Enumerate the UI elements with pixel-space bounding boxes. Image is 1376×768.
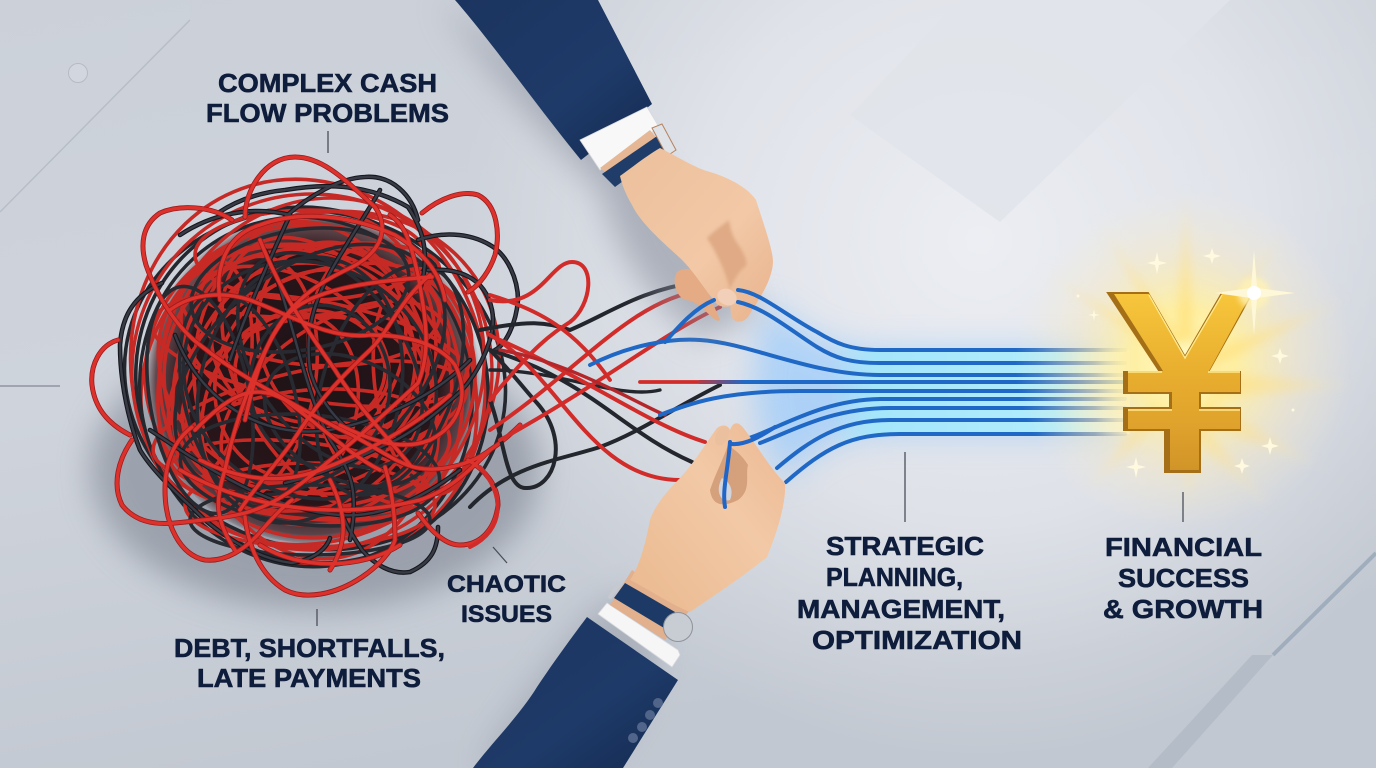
lower hand shadow (480, 590, 659, 768)
hand shadow (440, 0, 760, 340)
label: strategic planning, management, optimization: STRATEGIC (826, 531, 984, 561)
back fingers (675, 269, 720, 321)
lower arm and hand (473, 423, 785, 768)
upper arm and hand (440, 0, 773, 340)
label: complex cash flow problems (206, 68, 449, 153)
blue loop in lower hand (724, 427, 775, 507)
finger creases (707, 220, 747, 290)
label: strategic planning, management, optimization: OPTIMIZATION (812, 625, 1022, 655)
label: strategic planning, management, optimization: PLANNING, (826, 562, 963, 592)
black outer wires (120, 177, 518, 573)
label: debt, shortfalls, late payments: DEBT, SHORTFALLS, (174, 633, 445, 663)
dark inner wires (127, 194, 493, 555)
light rays (1035, 185, 1365, 540)
glow (1015, 190, 1355, 530)
large sparkle (1215, 250, 1295, 335)
label: financial success and growth: FINANCIAL (1105, 532, 1262, 562)
lower hand (630, 423, 785, 612)
lower finger gap (710, 445, 748, 504)
label: financial success and growth: SUCCESS (1118, 563, 1249, 593)
dense inner red wires (109, 191, 509, 579)
yen highlights (1128, 295, 1240, 410)
label: strategic planning, management, optimization (797, 452, 1022, 655)
thumbnail (715, 286, 739, 308)
label: chaotic issues: ISSUES (461, 601, 552, 628)
yen bevel (1108, 293, 1252, 472)
organized blue wires (590, 340, 1125, 482)
label: financial success and growth: & GROWTH (1103, 594, 1263, 624)
upper sleeve (455, 0, 652, 160)
label: chaotic issues (447, 547, 566, 628)
upper watch (600, 124, 676, 187)
lower sleeve (473, 617, 678, 768)
upper shirt cuff (580, 107, 659, 170)
outer wire rings (63, 129, 561, 635)
sparkles (1076, 248, 1294, 478)
lower watch (607, 582, 692, 642)
lower thumb nail (712, 424, 732, 448)
tangled wire ball (63, 129, 720, 635)
label: debt, shortfalls, late payments: LATE PAYMENTS (197, 663, 421, 693)
label: chaotic issues: CHAOTIC (447, 571, 566, 598)
sleeve buttons (628, 698, 663, 743)
blue wires through upper fingers (665, 290, 1125, 363)
yen face (1114, 294, 1251, 470)
label: complex cash flow problems: FLOW PROBLEMS (206, 98, 449, 128)
upper hand (620, 148, 773, 322)
yen symbol with glow (1015, 185, 1365, 540)
blue glow behind straightened wires (754, 300, 1130, 482)
label: strategic planning, management, optimization: MANAGEMENT, (797, 594, 1005, 624)
lower wrist (610, 570, 690, 640)
label: financial success and growth (1103, 492, 1263, 624)
label: complex cash flow problems: COMPLEX CASH (218, 68, 437, 98)
tangle shadow (90, 330, 540, 610)
wires running toward the hands (470, 262, 720, 547)
bright red outer wires (92, 157, 520, 595)
dark core (144, 213, 480, 543)
lower shirt cuff (598, 603, 680, 667)
label: debt, shortfalls, late payments (174, 609, 445, 693)
